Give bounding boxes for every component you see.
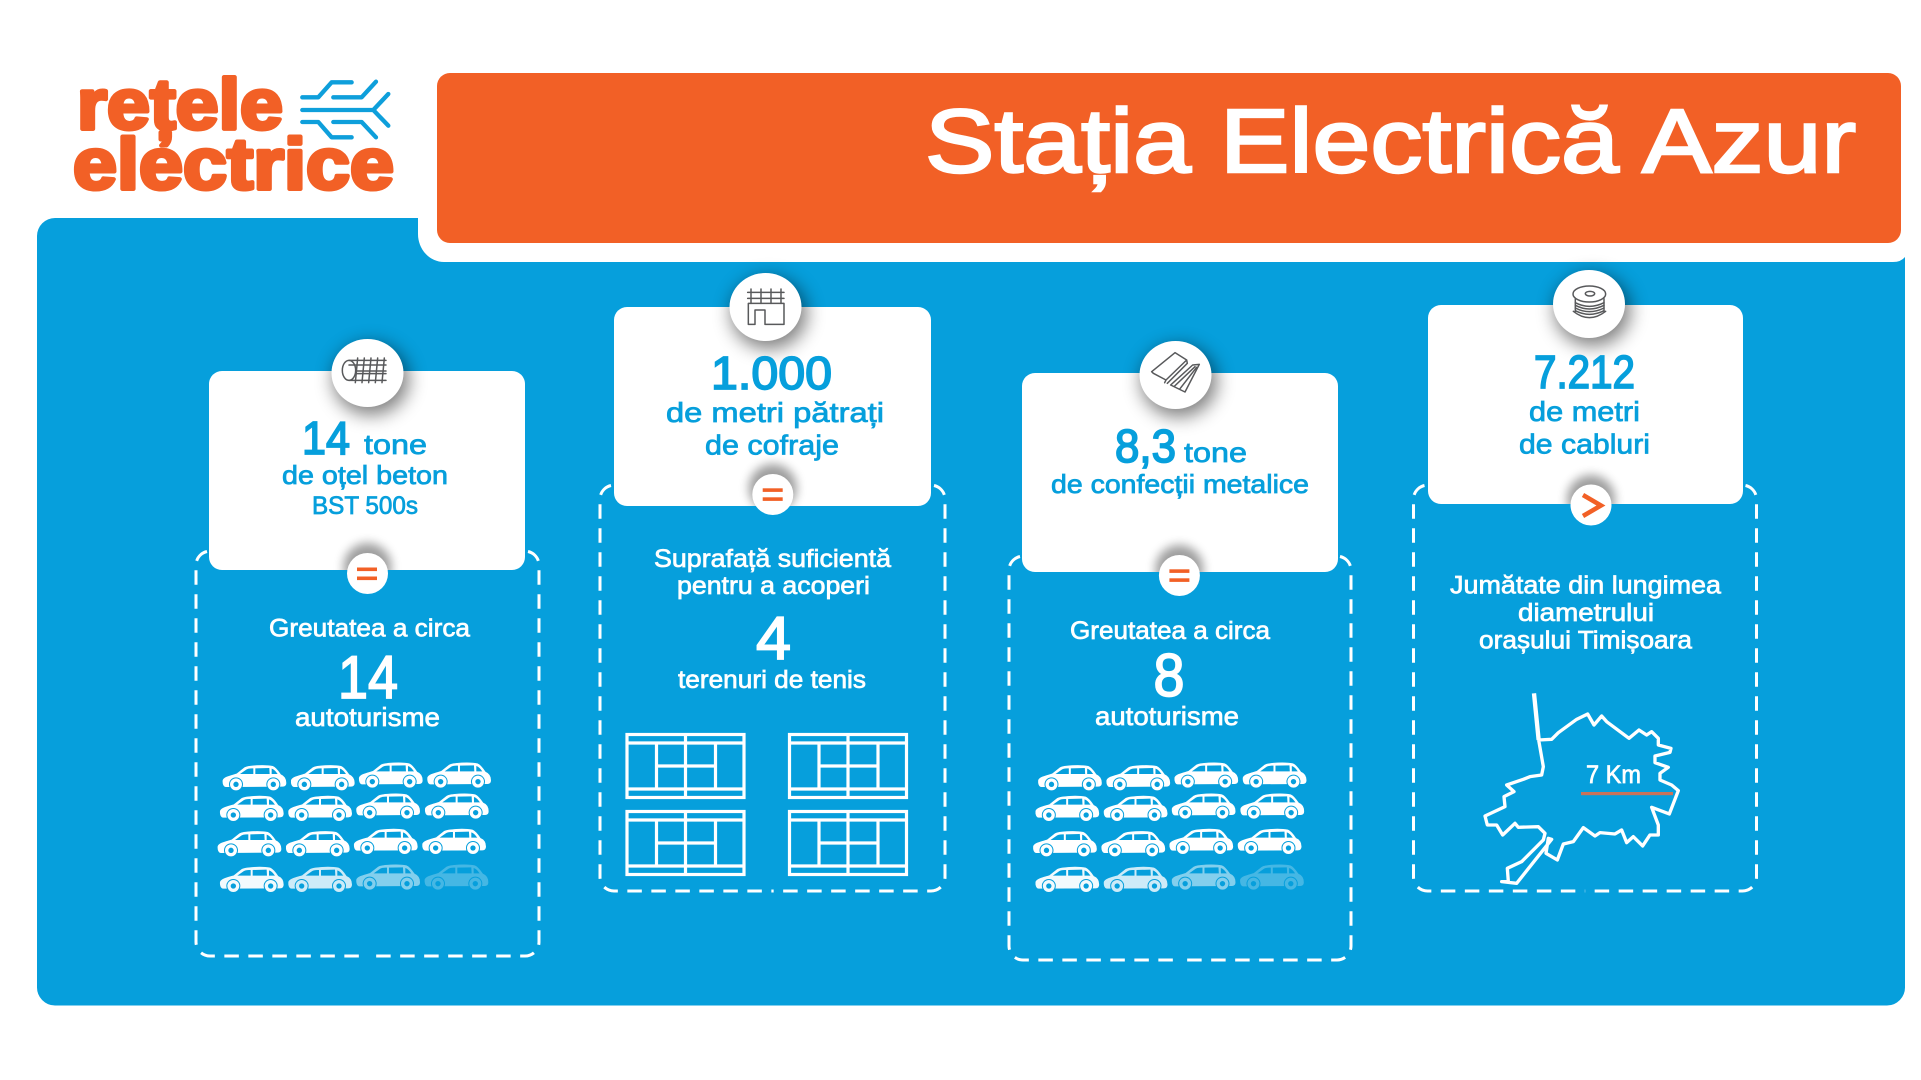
comparison text: terenuri de tenis <box>678 666 866 694</box>
equals badge <box>1155 545 1203 596</box>
comparison text <box>1450 572 1721 654</box>
logo icon: circuit lines <box>302 82 388 137</box>
comparison text: autoturisme <box>295 702 440 732</box>
stat: 1.000: de cofraje <box>705 430 839 460</box>
comparison text: Greutatea a circa <box>269 614 470 642</box>
comparison text <box>654 545 891 694</box>
stat: 14 tone: BST 500s <box>312 492 418 520</box>
title: Stația Electrică Azur <box>925 92 1856 192</box>
logo wordmark: electrice <box>73 125 394 205</box>
comparison text: orașului Timișoara <box>1479 626 1692 654</box>
comparison text <box>1070 617 1270 731</box>
icon shadow <box>1141 345 1217 417</box>
stat: 8,3 tone: tone <box>1184 437 1247 468</box>
panel: oțel beton <box>196 339 539 956</box>
comparison text: Greutatea a circa <box>1070 617 1270 645</box>
tennis courts <box>627 734 906 874</box>
background panel <box>37 218 1905 1006</box>
stat: 8,3 tone <box>1051 420 1309 499</box>
title banner <box>437 73 1901 243</box>
dashed box <box>600 486 945 891</box>
stat: 7.212: de cabluri <box>1519 428 1650 460</box>
comparison text: autoturisme <box>1095 701 1239 731</box>
card <box>1428 305 1743 504</box>
panel: confecții metalice <box>1009 341 1351 960</box>
comparison text: Suprafață suficientă <box>654 545 891 573</box>
icon shadow <box>1554 274 1630 346</box>
map: Timișoara outline <box>1485 693 1678 883</box>
logo wordmark: rețele <box>77 66 283 145</box>
card <box>614 307 931 506</box>
cars <box>1033 763 1306 893</box>
equals badge <box>344 543 392 594</box>
card <box>1022 373 1338 572</box>
comparison text: diametrului <box>1518 599 1654 627</box>
comparison text: pentru a acoperi <box>677 572 870 600</box>
icon: cable spool <box>1553 270 1625 338</box>
card <box>209 371 525 570</box>
stat: 14 tone: de oțel beton <box>282 460 448 490</box>
cars <box>218 763 491 893</box>
dashed box <box>1009 556 1351 960</box>
arrow badge <box>1567 475 1615 526</box>
stat: 7.212: 7.212 <box>1534 346 1635 398</box>
comparison text: 8 <box>1154 642 1184 709</box>
panel: cabluri <box>1414 270 1756 891</box>
stat: 1.000: 1.000 <box>711 347 832 399</box>
logo <box>73 66 394 205</box>
logo wordmark <box>73 66 394 205</box>
icon shadow <box>731 277 807 349</box>
icon: metal profiles <box>1140 341 1212 409</box>
icon: rebar <box>332 339 404 407</box>
comparison text: Jumătate din lungimea <box>1450 572 1721 600</box>
stat: 7.212: de metri <box>1529 396 1640 427</box>
comparison text: 4 <box>756 605 791 672</box>
stat: 1.000 <box>666 347 884 460</box>
stat: 8,3 tone: 8,3 <box>1115 420 1176 472</box>
map label: 7 Km <box>1586 761 1641 789</box>
stat: 14 tone: 14 <box>302 412 350 464</box>
comparison text: 14 <box>338 644 398 711</box>
icon: formwork <box>730 273 802 341</box>
stat: 1.000: de metri pătrați <box>666 397 884 428</box>
stat: 8,3 tone: de confecții metalice <box>1051 469 1309 499</box>
dashed box <box>196 552 539 956</box>
map distance line <box>1581 792 1673 795</box>
comparison text <box>269 614 470 732</box>
stat: 7.212 <box>1519 346 1650 460</box>
stat: 14 tone <box>282 412 448 520</box>
dashed box <box>1414 486 1756 891</box>
equals badge <box>749 464 797 515</box>
stat: 14 tone: tone <box>364 429 427 460</box>
icon shadow <box>333 343 409 415</box>
panel: cofraje <box>600 273 945 891</box>
